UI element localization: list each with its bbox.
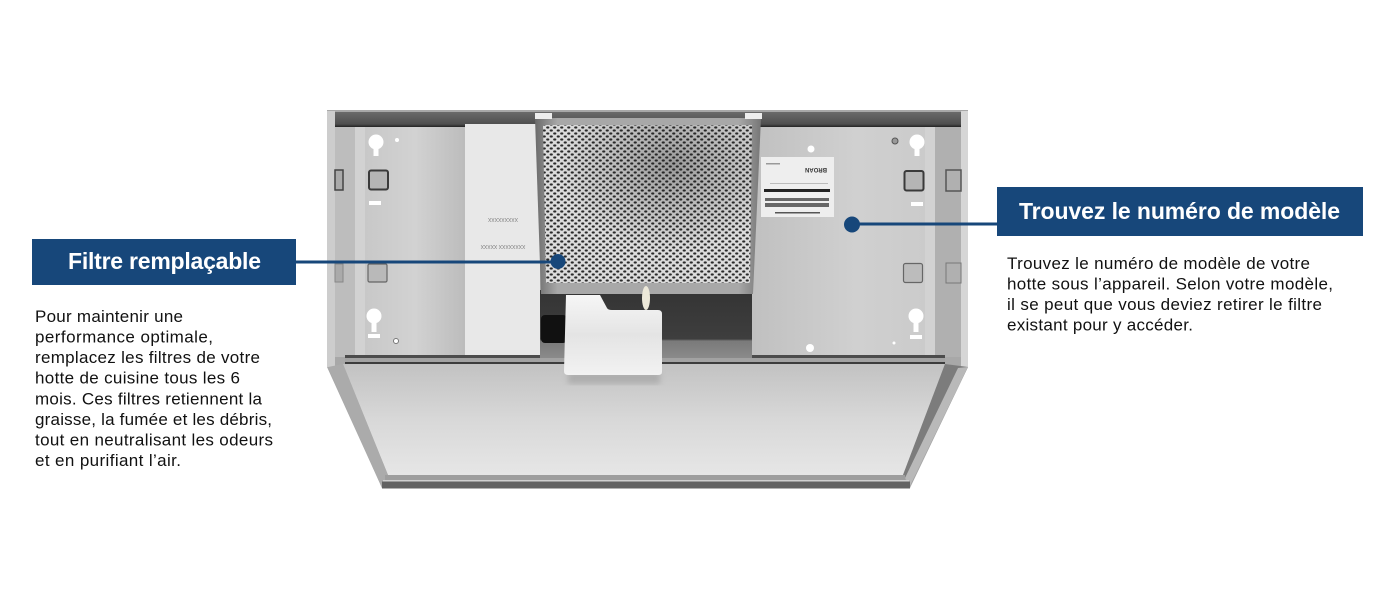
baffle plate: XXXXXXXX XXXXX — [480, 243, 525, 249]
keyhole bottom left — [366, 308, 382, 338]
keyhole bottom right — [908, 308, 924, 339]
right side strip — [961, 111, 968, 367]
text block: model: il se peut que vous deviez retirer le filtre — [1007, 295, 1322, 314]
baffle plate: XXXXXXXXX — [487, 216, 518, 222]
heading box: filter — [32, 239, 296, 285]
text block: filter: performance optimale, — [35, 328, 213, 346]
heading box: model — [997, 187, 1363, 236]
right back panel — [752, 127, 925, 355]
outer hood body — [327, 110, 968, 488]
left rim — [328, 364, 388, 488]
text block: model: hotte sous l’appareil. Selon votre modèle, — [1007, 274, 1333, 294]
ledge under panels — [345, 355, 945, 364]
dot marker: model — [844, 216, 860, 232]
lower hood panel — [328, 364, 968, 488]
baffle plate — [465, 124, 540, 358]
keyhole top right — [910, 134, 924, 206]
slot top left — [369, 201, 381, 205]
connector line: model — [852, 222, 997, 226]
light box shadow — [568, 372, 660, 384]
text block: filter: et en purifiant l’air. — [35, 451, 181, 470]
callout: replaceable filter — [32, 239, 566, 470]
text block: filter: remplacez les filtres de votre — [35, 348, 260, 367]
text block: filter: mois. Ces filtres retiennent la — [35, 389, 263, 408]
filter mesh — [543, 125, 752, 283]
dark fan cavity — [540, 290, 752, 358]
text block: model: existant pour y accéder. — [1007, 316, 1193, 334]
dot marker: filter — [550, 254, 566, 269]
screw holes left — [394, 138, 399, 344]
heading box: model: Trouvez le numéro de modèle — [1019, 198, 1340, 224]
bracket top left — [369, 170, 388, 190]
text block: model: Trouvez le numéro de modèle de votre — [1007, 254, 1310, 273]
filter frame — [535, 118, 761, 294]
bottom rim — [382, 475, 910, 488]
bracket bottom right — [904, 264, 922, 282]
screw holes right — [806, 138, 898, 352]
hood light housing — [564, 295, 662, 375]
text block: filter: hotte de cuisine tous les 6 — [35, 369, 240, 388]
keyhole top left — [368, 134, 384, 156]
heading box: filter: Filtre remplaçable — [68, 248, 261, 274]
connector line: filter — [296, 260, 558, 264]
left back panel — [365, 127, 465, 355]
text block: filter: graisse, la fumée et les débris, — [35, 410, 272, 429]
left side strip — [327, 111, 335, 367]
callout: model number — [844, 187, 1363, 334]
filter clip right — [745, 113, 762, 119]
left side wall — [335, 127, 365, 357]
model label — [761, 157, 834, 217]
right side wall — [925, 127, 961, 357]
filter clip left — [535, 113, 552, 119]
top dark band — [335, 112, 961, 127]
right rim — [903, 364, 968, 486]
text block: filter: tout en neutralisant les odeurs — [35, 430, 273, 450]
right rim highlight — [905, 367, 968, 486]
light switch pin — [642, 286, 650, 310]
bracket top right — [904, 171, 924, 190]
hood photo — [327, 110, 968, 488]
model label: BROAN — [805, 166, 827, 172]
text block: filter: Pour maintenir une — [35, 307, 183, 326]
bracket bottom left — [368, 264, 387, 282]
